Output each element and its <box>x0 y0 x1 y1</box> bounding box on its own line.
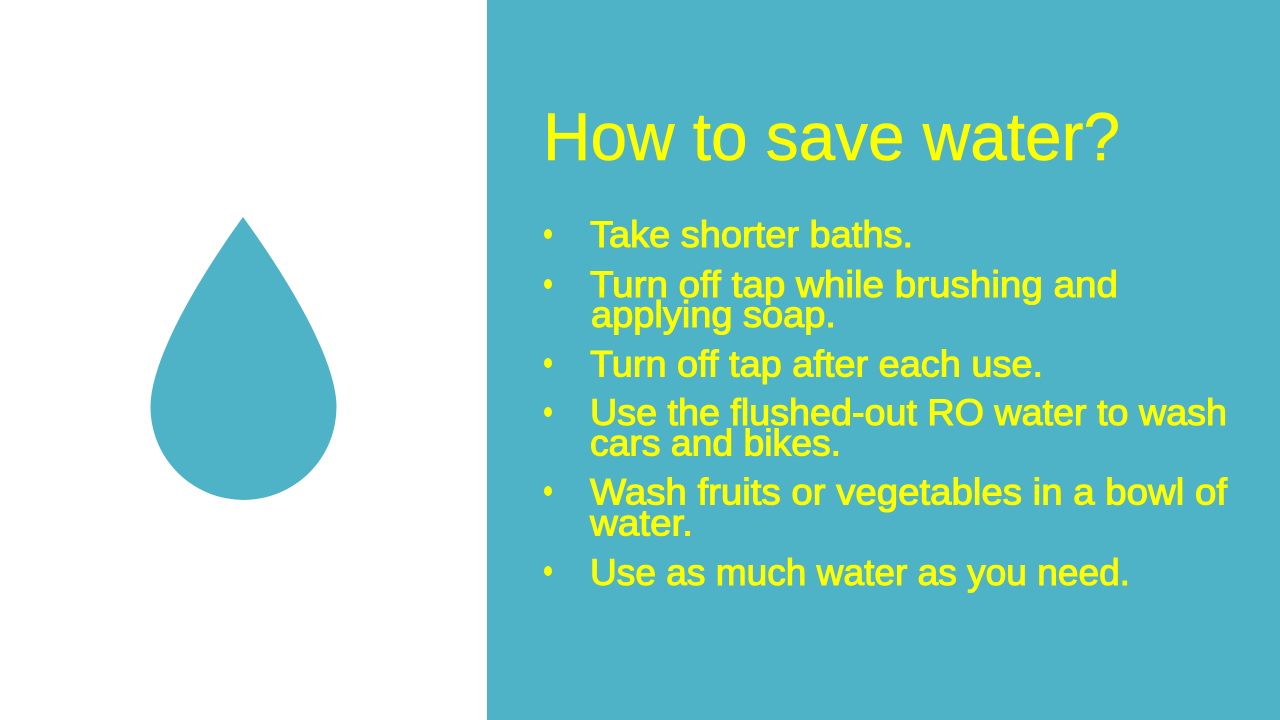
icon: water drop <box>150 217 336 500</box>
list item: tap after use: Turn off tap after each use. <box>590 342 1043 384</box>
list item: tap while brushing: applying soap. <box>591 293 836 335</box>
list item: bowl of water: water. <box>589 502 693 544</box>
panel: right teal content <box>487 0 1280 720</box>
list item: bowl of water: Wash fruits or vegetables in a bowl of <box>590 470 1228 512</box>
list item: RO water: cars and bikes. <box>590 422 841 464</box>
list item: RO water <box>544 391 1227 464</box>
bullet list <box>544 213 1228 593</box>
list item: bowl of water <box>544 470 1228 544</box>
list item: shorter baths: Take shorter baths. <box>590 213 913 255</box>
list item: tap while brushing <box>544 263 1118 335</box>
panel: left white background <box>0 0 487 720</box>
list item: tap while brushing: Turn off tap while brushing and <box>590 263 1118 305</box>
list item: as much as you need: Use as much water as you need. <box>590 551 1130 593</box>
list item: RO water: Use the flushed-out RO water to wash <box>590 391 1227 433</box>
title: How to save water? <box>543 99 1120 175</box>
